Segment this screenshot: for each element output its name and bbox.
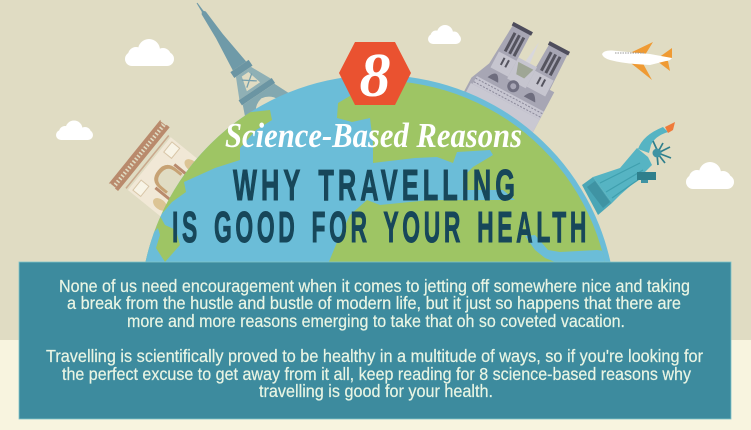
background: upper beige xyxy=(0,0,751,340)
icon: Notre-Dame cathedral xyxy=(458,17,574,141)
right continent xyxy=(329,82,605,262)
icon: Arc de Triomphe xyxy=(109,120,220,232)
background: lower cream xyxy=(0,340,751,430)
paragraph 1 xyxy=(59,276,690,331)
icon: cloud right xyxy=(686,162,734,189)
icon: cloud top left xyxy=(125,39,174,66)
ocean inlet lower right xyxy=(525,235,605,262)
paragraph 2: Travelling is scientifically proved to be healthy in a multitude of ways, so if you're looking for xyxy=(46,346,703,366)
paragraph 1: None of us need encouragement when it comes to jetting off somewhere nice and taking xyxy=(59,276,690,296)
paragraph 1: a break from the hustle and bustle of modern life, but it just so happens that there are xyxy=(67,293,681,313)
paragraph 1: more and more reasons emerging to take that oh so coveted vacation. xyxy=(127,311,625,331)
icon: Statue of Liberty xyxy=(582,122,675,215)
globe ocean xyxy=(145,75,611,264)
icon: airplane xyxy=(602,42,672,80)
ocean patch on left limb xyxy=(146,228,165,262)
subtitle: Science-Based Reasons xyxy=(225,116,522,155)
globe xyxy=(146,77,610,262)
number 8: 8 xyxy=(360,42,390,110)
title line 1: WHY TRAVELLING xyxy=(233,161,519,210)
left continent xyxy=(146,110,272,262)
hexagon badge xyxy=(339,42,411,110)
paragraph 2: the perfect excuse to get away from it all, keep reading for 8 science-based reasons why xyxy=(62,364,691,384)
panel background xyxy=(19,262,731,419)
paragraph 2 xyxy=(46,346,703,401)
paragraph 2: travelling is good for your health. xyxy=(259,381,493,401)
icon: Eiffel Tower xyxy=(172,0,298,133)
intro panel xyxy=(19,262,731,419)
icon: cloud top centre xyxy=(428,25,461,44)
icon: cloud left xyxy=(56,120,93,140)
